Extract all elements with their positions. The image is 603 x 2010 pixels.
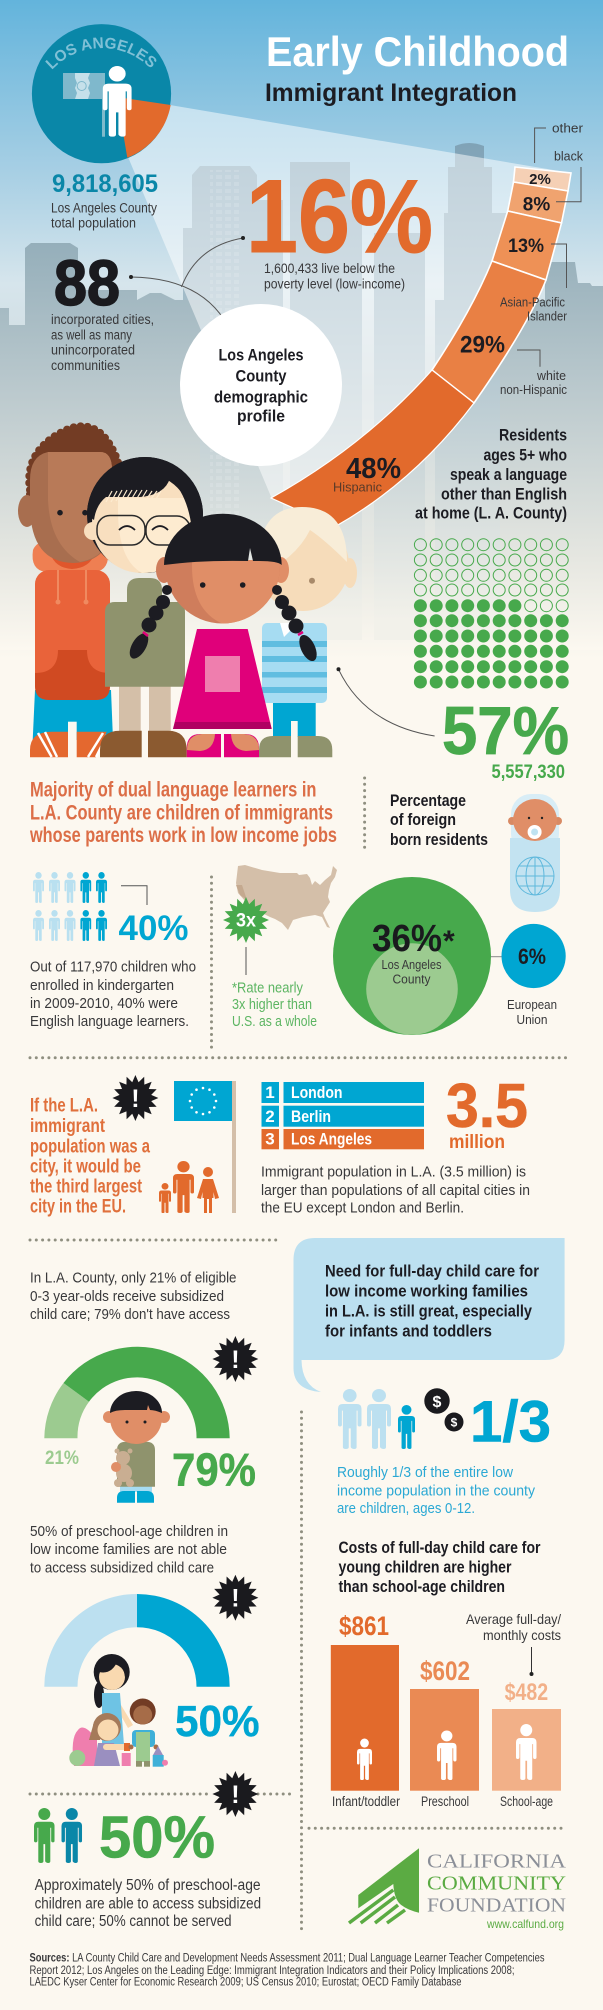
logo: California Community Foundation: COMMUNITY (427, 1872, 566, 1894)
title (265, 28, 569, 107)
ring labels: 29% (460, 332, 505, 359)
heading: costs of care (338, 1538, 541, 1596)
map: United States (236, 865, 337, 930)
panel: Los Angeles county circle: LOS ANGELES (45, 37, 156, 70)
gauge chart: 21 / 79 percent: 21% (45, 1448, 79, 1469)
stat: 50 percent served: 50% (99, 1804, 215, 1870)
text: kindergarten learners: English language learners. (30, 1013, 189, 1030)
gauge chart: 50 percent (44, 1594, 260, 1746)
icon group: family with coins: $ (433, 1394, 442, 1411)
language residents heading: other than English (441, 484, 567, 503)
language residents heading: ages 5+ who (484, 446, 567, 465)
illustration: four children (18, 426, 357, 758)
ring labels: white (536, 368, 566, 383)
bar: preschool: $602 (420, 1656, 470, 1686)
bar: school-age: $482 (505, 1679, 548, 1706)
starburst: 3x (223, 897, 269, 975)
text: low income children: are children, ages 0-12. (337, 1500, 475, 1517)
3.5 million stat: million (449, 1132, 505, 1153)
ring labels: Hispanic (333, 480, 382, 495)
language residents heading: speak a language (450, 465, 567, 484)
total population stat (51, 170, 158, 231)
note: average monthly costs: Average full-day/ (466, 1611, 561, 1627)
57 percent stat (336, 667, 569, 783)
note: rate comparison: 3x higher than (232, 997, 312, 1013)
demographic profile circle: County (236, 367, 287, 386)
bar: school-age (492, 1679, 561, 1809)
text: preschool served: children are able to access subsidized (35, 1895, 261, 1912)
chart: foreign born circles: * (443, 925, 455, 958)
poverty stat: poverty level (low-income) (264, 277, 405, 292)
ranking list of EU cities: London (291, 1083, 342, 1102)
speech bubble: need for child care: in L.A. is still great, especially (325, 1302, 532, 1321)
icon: exclamation burst: ! (131, 1085, 140, 1113)
ranking list of EU cities: 3 (265, 1129, 275, 1148)
language residents heading: Residents (499, 426, 567, 445)
title: Immigrant Integration (265, 79, 517, 107)
text: third largest city: immigrant (30, 1116, 106, 1137)
total population stat: 9,818,605 (52, 170, 158, 198)
child: girl with braids in pink dress (126, 514, 320, 757)
text: subsidized care 0-3: child care; 79% don't have access (30, 1306, 230, 1323)
ring labels (333, 121, 584, 495)
gauge chart: 21 / 79 percent: 79% (172, 1444, 256, 1496)
speech bubble: need for child care: Need for full-day child care for (325, 1262, 539, 1281)
chart: foreign born circles: 36% (372, 918, 442, 960)
icon: burst three (212, 1771, 258, 1817)
demographic profile circle (180, 304, 342, 466)
heading: costs of care: young children are higher (338, 1558, 512, 1577)
total population stat: Los Angeles County (51, 201, 157, 216)
language residents heading: at home (L. A. County) (415, 504, 567, 523)
panel: Los Angeles county circle (32, 24, 172, 164)
icon group: family with coins: $ (451, 1416, 458, 1430)
heading: foreign born residents: of foreign (390, 811, 456, 829)
poverty stat: 1,600,433 live below the (264, 261, 395, 276)
icon: child with teddy bear (103, 1391, 170, 1503)
text: third largest city: population was a (30, 1136, 150, 1157)
text: kindergarten learners: in 2009-2010, 40% were (30, 995, 178, 1012)
text: subsidized care 0-3 (30, 1270, 236, 1323)
text: subsidized care 0-3: In L.A. County, only 21% of eligible (30, 1270, 236, 1287)
incorporated cities stat: communities (51, 358, 120, 373)
light beam from county circle (128, 105, 571, 527)
demographic profile circle: Los Angeles (218, 346, 304, 365)
text: third largest city: city in the EU. (30, 1197, 126, 1218)
text: preschool access: low income families are not able (30, 1541, 227, 1558)
icon: burst one: ! (231, 1346, 240, 1374)
child: boy in orange hoodie (18, 426, 118, 758)
dot grid: 57 of 100 (414, 539, 569, 688)
note: rate comparison (232, 981, 317, 1030)
incorporated cities stat: unincorporated (51, 343, 135, 358)
ring labels: 2% (529, 171, 551, 188)
icon: immigrant family (159, 1161, 219, 1213)
ring labels: Asian-Pacific (500, 295, 565, 310)
heading: costs of care: than school-age children (338, 1577, 505, 1596)
note: average monthly costs: monthly costs (483, 1627, 561, 1643)
chart: foreign born circles: County (392, 971, 431, 986)
bar: infant/toddler (331, 1611, 400, 1809)
text: kindergarten learners: enrolled in kindergarten (30, 977, 174, 994)
text: immigrant population comparison: the EU except London and Berlin. (261, 1200, 464, 1217)
57 percent stat: 5,557,330 (492, 762, 565, 783)
ring labels: 8% (523, 195, 550, 216)
chart: foreign born circles (333, 877, 566, 1035)
text: preschool access: 50% of preschool-age children in (30, 1523, 228, 1540)
sources: LAEDC Kyser Center for Economic Research 2009; US Census 2010; Eurostat; OECD Family Database (30, 1977, 462, 1989)
text: preschool served (35, 1877, 261, 1930)
one third stat: 1/3 (470, 1390, 551, 1455)
text: preschool served: child care; 50% cannot be served (35, 1913, 232, 1930)
text: immigrant population comparison: larger than populations of all capital cities in (261, 1182, 530, 1199)
note: rate comparison: *Rate nearly (232, 981, 304, 997)
sources (30, 1953, 545, 1989)
heading: dual language learners: L.A. County are children of immigrants (30, 801, 333, 824)
ranking list of EU cities: Los Angeles (291, 1129, 372, 1148)
heading: foreign born residents (390, 792, 488, 849)
speech bubble: need for child care: for infants and toddlers (325, 1322, 492, 1341)
chart: foreign born circles: 6% (518, 944, 546, 969)
ethnicity ring chart (271, 167, 571, 527)
illustration: mother and children (69, 1654, 168, 1767)
total population stat: total population (51, 216, 136, 231)
text: low income children: income population in the county (337, 1483, 535, 1500)
ring labels: black (554, 149, 583, 164)
heading: dual language learners: Majority of dual language learners in (30, 779, 316, 802)
logo: California Community Foundation: www.calfund.org (486, 1917, 564, 1931)
text: third largest city: city, it would be (30, 1156, 141, 1177)
gauge chart: 21 / 79 percent (44, 1347, 256, 1496)
heading: dual language learners (29, 779, 337, 847)
chart: foreign born circles: Los Angeles (382, 957, 442, 972)
icon group: family with coins (338, 1388, 464, 1449)
ranking list of EU cities: Berlin (291, 1107, 331, 1126)
text: kindergarten learners: Out of 117,970 children who (30, 959, 196, 976)
heading: foreign born residents: Percentage (390, 792, 466, 810)
ranking list of EU cities: 2 (265, 1107, 275, 1126)
text: immigrant population comparison (261, 1164, 530, 1217)
text: kindergarten learners (30, 959, 196, 1030)
logo: California Community Foundation: FOUNDATION (427, 1895, 566, 1917)
note: rate comparison: U.S. as a whole (232, 1014, 317, 1030)
sources: Report 2012; Los Angeles on the Leading Edge: Immigrant Integration Indicators and their Policy Implications 2008; (30, 1965, 514, 1977)
chart: foreign born circles: European (507, 997, 557, 1012)
text: preschool access (30, 1523, 228, 1576)
ring labels: 13% (508, 236, 544, 257)
57 percent stat: 57% (442, 693, 569, 769)
icon: EU flag (174, 1081, 236, 1213)
text: low income children: Roughly 1/3 of the entire low (337, 1464, 513, 1481)
incorporated cities stat: 88 (54, 247, 120, 319)
icon: burst two (212, 1575, 258, 1621)
ring labels: Islander (527, 309, 568, 324)
text: preschool served: Approximately 50% of preschool-age (35, 1877, 261, 1894)
ranking list of EU cities: 1 (265, 1083, 275, 1102)
bar: preschool: Preschool (421, 1794, 469, 1809)
incorporated cities stat (51, 247, 154, 373)
text: third largest city: the third largest (30, 1177, 143, 1198)
text: third largest city: If the L.A. (30, 1096, 98, 1117)
ring labels: other (552, 121, 584, 136)
demographic profile circle: profile (237, 407, 285, 426)
stat: 50 percent served (34, 1804, 215, 1870)
city skyline background (0, 143, 603, 650)
heading: dual language learners: whose parents work in low income jobs (29, 824, 337, 847)
text: third largest city (30, 1096, 150, 1218)
40 percent stat: 40% (118, 909, 188, 948)
bar: school-age: School-age (500, 1794, 553, 1809)
logo: California Community Foundation: CALIFORNIA (427, 1850, 567, 1872)
incorporated cities stat: as well as many (51, 327, 132, 342)
bar chart: monthly child care costs (331, 1611, 561, 1809)
icon: burst one (212, 1336, 258, 1382)
bar: infant/toddler: $861 (339, 1611, 389, 1641)
gauge chart: 50 percent: 50% (175, 1697, 260, 1746)
leader lines to profile circle (129, 236, 245, 341)
heading: foreign born residents: born residents (390, 831, 488, 849)
icon: burst two: ! (231, 1585, 240, 1613)
3.5 million stat: 3.5 (446, 1072, 528, 1141)
child: blond child in striped shirt (257, 507, 357, 757)
bar: preschool (410, 1656, 479, 1809)
chart: foreign born circles: Union (516, 1012, 548, 1027)
icon group: 40 percent people (33, 872, 147, 941)
ring labels: non-Hispanic (500, 382, 567, 397)
ring labels: 48% (346, 453, 401, 485)
incorporated cities stat: incorporated cities, (51, 312, 154, 327)
text: subsidized care 0-3: 0-3 year-olds receive subsidized (30, 1288, 224, 1305)
language residents heading (415, 426, 567, 523)
icon: burst three: ! (231, 1781, 240, 1809)
demographic profile circle: demographic (214, 388, 308, 407)
logo: California Community Foundation (349, 1848, 567, 1931)
icon: swaddled baby (508, 794, 562, 912)
text: low income children (337, 1464, 535, 1517)
note: average monthly costs (466, 1611, 561, 1676)
speech bubble: need for child care: low income working families (325, 1282, 528, 1301)
text: immigrant population comparison: Immigrant population in L.A. (3.5 million) is (261, 1164, 526, 1181)
speech bubble: need for child care (294, 1238, 565, 1392)
ranking list of EU cities (262, 1082, 424, 1149)
text: preschool access: to access subsidized child care (30, 1559, 214, 1576)
bar: infant/toddler: Infant/toddler (332, 1794, 400, 1809)
heading: costs of care: Costs of full-day child care for (338, 1538, 541, 1557)
title: Early Childhood (266, 28, 569, 75)
child: child with glasses (84, 457, 203, 757)
poverty stat: 16% (246, 159, 433, 275)
icon: exclamation burst (112, 1075, 158, 1121)
starburst: 3x: 3x (236, 910, 256, 932)
